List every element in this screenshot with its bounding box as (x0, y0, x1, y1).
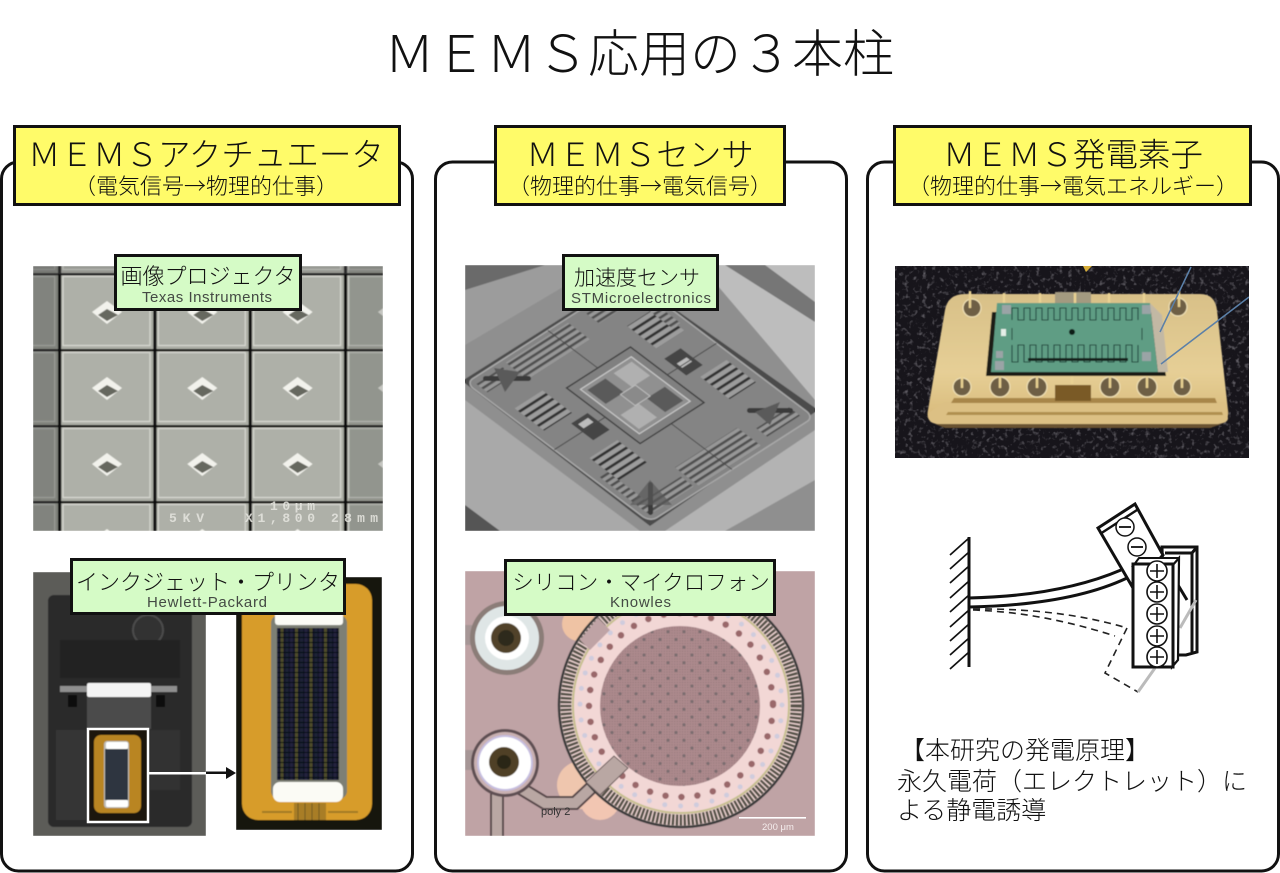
cantilever beam (969, 570, 1127, 607)
text block: generation principle: 【本研究の発電原理】 (900, 731, 1150, 767)
trace label: poly 2 (541, 806, 570, 818)
header: MEMS sensor: ＭＥＭＳセンサ (526, 129, 754, 176)
tilted electrode with negative charges (1098, 504, 1163, 588)
front electrode with positive charges (1133, 558, 1179, 667)
scale bar (739, 817, 806, 833)
label: inkjet printer: インクジェット・プリンタ (76, 565, 340, 597)
SEM caption (170, 502, 378, 524)
diagram: electret electrostatic induction (950, 504, 1197, 692)
text block: generation principle (897, 731, 1247, 827)
title: ＭＥＭＳ応用の３本柱 (384, 13, 894, 87)
image: silicon microphone (465, 571, 815, 836)
back electrode (1162, 547, 1197, 655)
deflected beam dashed outline (973, 609, 1138, 692)
image: projector micromirror array (33, 266, 383, 531)
arrow: zoom to printhead (206, 767, 236, 779)
SEM caption: X1,800 (245, 511, 315, 526)
image: accelerometer SEM (462, 265, 818, 531)
label: silicon microphone: シリコン・マイクロフォン (512, 566, 770, 597)
scale bar: 200 μm (762, 822, 794, 833)
annotation lines (1160, 267, 1249, 364)
yellow pointer (1083, 266, 1092, 272)
label: image projector: Texas Instruments (142, 289, 272, 306)
header: MEMS sensor: （物理的仕事→電気信号） (508, 169, 772, 201)
label: accelerometer: STMicroelectronics (571, 290, 711, 307)
header: MEMS actuator: （電気信号→物理的仕事） (74, 169, 338, 201)
image: inkjet cartridge (33, 572, 206, 836)
label: image projector: 画像プロジェクタ (120, 259, 296, 291)
fixed wall with hatching (950, 537, 969, 669)
label: silicon microphone (506, 560, 774, 614)
text block: generation principle: 永久電荷（エレクトレット）に (897, 762, 1247, 798)
tether lines (1138, 585, 1196, 692)
panel frame: generator (868, 162, 1278, 871)
white zoom frame (88, 729, 148, 822)
panel frame: sensor (436, 162, 846, 871)
header: MEMS sensor (496, 126, 784, 204)
label: silicon microphone: Knowles (610, 594, 671, 611)
panel frame: actuator (2, 162, 412, 871)
SEM caption: 5KV (169, 511, 204, 526)
panel: MEMS power generator (868, 126, 1278, 871)
label: inkjet printer (72, 560, 344, 614)
image: printhead close-up (236, 577, 382, 830)
header: MEMS generator: ＭＥＭＳ発電素子 (943, 129, 1203, 176)
header: MEMS actuator (14, 126, 400, 204)
SEM caption: 28mm (331, 511, 378, 526)
panel: MEMS sensor (436, 126, 846, 871)
label: inkjet printer: Hewlett-Packard (147, 594, 267, 611)
header: MEMS actuator: ＭＥＭＳアクチュエータ (28, 129, 384, 176)
header: MEMS generator: （物理的仕事→電気エネルギー） (908, 169, 1238, 201)
label: accelerometer: 加速度センサ (574, 262, 700, 292)
image: energy harvester device (895, 266, 1249, 458)
panel: MEMS actuator (2, 126, 412, 871)
header: MEMS generator (894, 126, 1250, 204)
SEM caption: 10μm (270, 499, 315, 514)
label: accelerometer (564, 256, 718, 310)
text block: generation principle: よる静電誘導 (897, 791, 1046, 827)
label: image projector (116, 256, 300, 310)
